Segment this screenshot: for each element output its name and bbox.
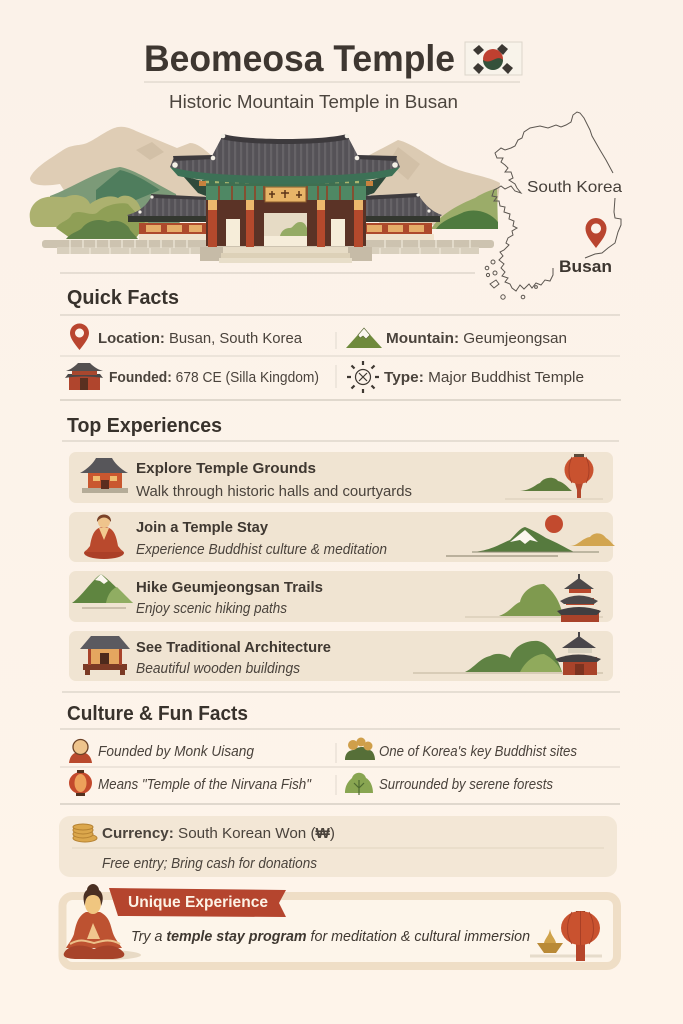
- gate name board: [265, 187, 306, 202]
- side wing: left: [127, 194, 209, 240]
- icon: temple: [65, 363, 103, 390]
- text: entry note: Free entry; Bring cash for donations: [102, 856, 317, 872]
- gate body: [183, 176, 387, 248]
- icon: lantern: [69, 770, 92, 796]
- fact: type: Type: Major Buddhist Temple: [384, 369, 584, 386]
- icon: temple hall: [80, 458, 128, 493]
- scene: trees and pagoda: [413, 632, 603, 675]
- scene: bush and pagoda: [465, 574, 603, 622]
- card: Hike Geumjeongsan Trails: [69, 571, 613, 622]
- icon: wooden hall: [80, 636, 130, 675]
- fact: founded: Founded: 678 CE (Silla Kingdom): [109, 369, 319, 386]
- side wing: right: [362, 193, 442, 240]
- icon: bushes: [345, 738, 375, 760]
- bushes: right: [431, 188, 498, 229]
- icon: meditating monk: [64, 884, 141, 960]
- card: Explore Temple Grounds: [69, 452, 613, 503]
- text: temple stay: Try a temple stay program for meditation & cultural immersion: [131, 929, 530, 945]
- icon: mountain: [346, 328, 382, 348]
- icon: monk: [69, 740, 92, 763]
- map label: Busan: Busan: [559, 257, 612, 276]
- scene: mountain and sun: [446, 515, 615, 556]
- card: See Traditional Architecture: [69, 631, 613, 681]
- map label: South Korea: South Korea: [527, 179, 622, 196]
- mountains: tan background: [30, 127, 500, 225]
- scene: bush and lantern: [505, 454, 603, 499]
- ribbon: [109, 888, 286, 917]
- map outline: [485, 112, 621, 299]
- icon: incense bowl: [530, 929, 602, 956]
- icon: meditating monk: [84, 514, 124, 559]
- icon: dharma wheel: [347, 361, 379, 393]
- illustration: temple gate and mountains: [30, 127, 500, 263]
- icon: location pin: [70, 324, 89, 350]
- fact: monk: Founded by Monk Uisang: [98, 744, 254, 760]
- icon: red lantern: [561, 911, 600, 961]
- panel: culture facts: [60, 729, 620, 804]
- mountain: green: [50, 167, 180, 225]
- text: description: Beautiful wooden buildings: [136, 661, 300, 677]
- text: title: Join a Temple Stay: [136, 519, 269, 536]
- fact: forests: Surrounded by serene forests: [379, 777, 553, 793]
- stairs: [200, 247, 372, 263]
- fact: name meaning: Means "Temple of the Nirvana Fish": [98, 777, 312, 793]
- panel: quick facts: [60, 315, 621, 400]
- panel: unique experience: [62, 884, 617, 966]
- text: title: Hike Geumjeongsan Trails: [136, 579, 323, 596]
- map: South Korea: [485, 112, 622, 299]
- fact: key Buddhist sites: One of Korea's key Buddhist sites: [379, 744, 577, 760]
- icon: Korean flag: [465, 42, 522, 75]
- ribbon label: Unique Experience: [128, 894, 268, 911]
- text: description: Experience Buddhist culture & meditation: [136, 542, 387, 558]
- text: title: See Traditional Architecture: [136, 639, 331, 656]
- fact: mountain: Mountain: Geumjeongsan: [386, 330, 567, 347]
- subtitle: Historic Mountain Temple in Busan: [169, 92, 458, 112]
- heading: Culture & Fun Facts: Culture & Fun Facts: [67, 703, 248, 725]
- bushes: left: [30, 195, 150, 239]
- text: description: Walk through historic halls and courtyards: [136, 483, 412, 500]
- title: Beomeosa Temple: [144, 38, 455, 79]
- divider under illustration: [60, 272, 475, 274]
- icon: green mountain: [72, 574, 133, 608]
- card: Join a Temple Stay: [69, 512, 615, 562]
- fact: location: Location: Busan, South Korea: [98, 330, 303, 347]
- panel: currency: [59, 816, 617, 877]
- main roof: [170, 134, 400, 184]
- text: description: Enjoy scenic hiking paths: [136, 601, 287, 617]
- text: title: Explore Temple Grounds: [136, 460, 316, 477]
- text: currency: Currency: South Korean Won (₩): [102, 825, 335, 842]
- icon: tree: [345, 773, 373, 795]
- icon: coins: [73, 824, 97, 842]
- map pin: Busan: [586, 218, 606, 248]
- heading: Top Experiences: Top Experiences: [67, 415, 222, 437]
- stone wall: [42, 240, 494, 254]
- heading: Quick Facts: Quick Facts: [67, 287, 179, 309]
